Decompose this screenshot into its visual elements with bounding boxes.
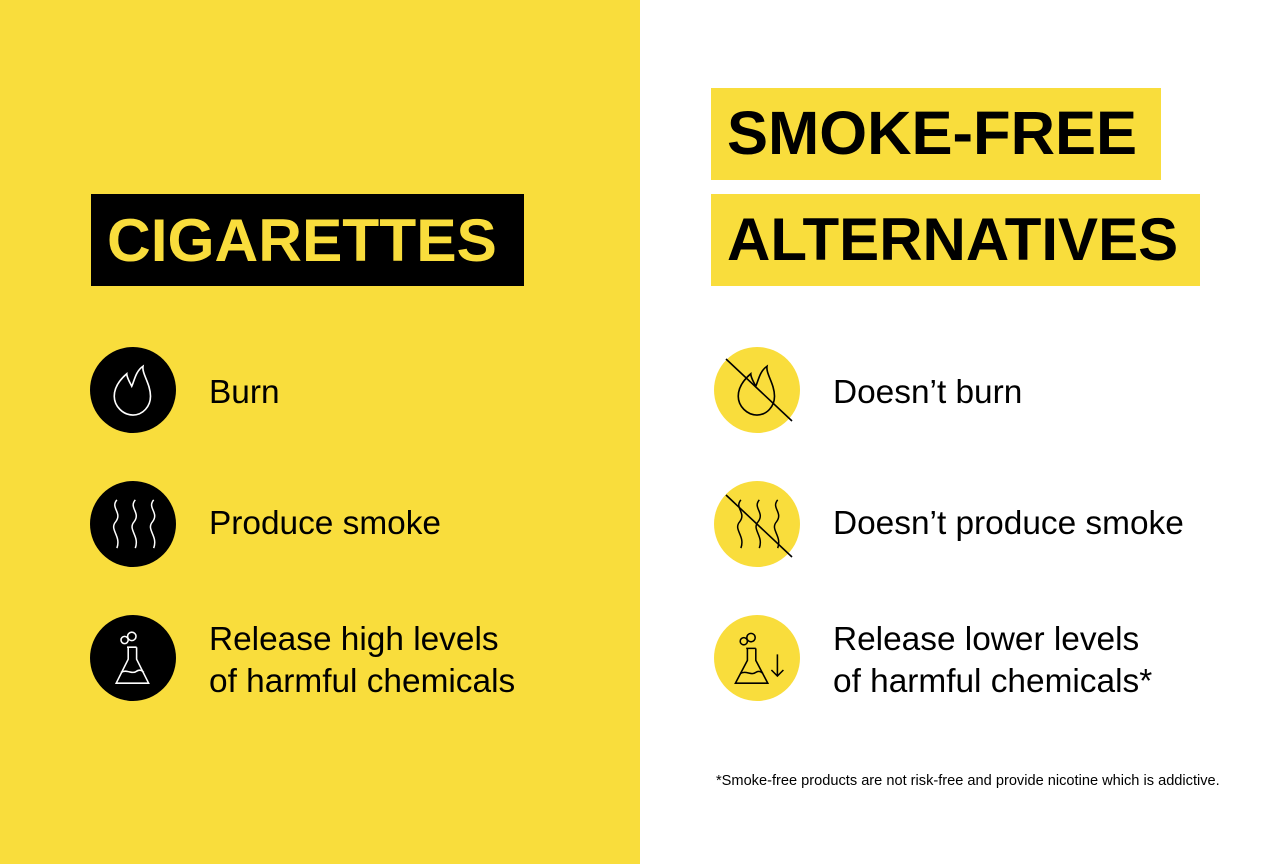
text: doesn't produce smoke: Doesn’t produce smoke: [833, 505, 1184, 542]
heading line 1: SMOKE-FREE: [727, 99, 1137, 168]
heading line 2: ALTERNATIVES: [727, 206, 1178, 273]
footnote: *Smoke-free products are not risk-free and provide nicotine which is addictive.: [716, 773, 1220, 789]
text: release lower levels: Release lower levels: [833, 621, 1139, 658]
icon: flask: [90, 615, 176, 701]
heading line 2: [711, 194, 1200, 286]
heading: cigarettes: CIGARETTES: [107, 206, 497, 274]
text: release high levels: [209, 621, 515, 700]
text: release high levels: Release high levels: [209, 621, 499, 658]
text: produce smoke: Produce smoke: [209, 505, 441, 542]
panel: smoke-free alternatives: [711, 88, 1220, 789]
text: release high levels: of harmful chemicals: [209, 663, 515, 700]
icon: no flame: [714, 347, 800, 433]
icon: flask with down arrow: [714, 615, 800, 701]
text: release lower levels: [833, 621, 1152, 700]
icon: no smoke: [714, 481, 800, 567]
panel: cigarettes: [0, 0, 640, 864]
heading line 1: [711, 88, 1161, 180]
icon: smoke: [90, 481, 176, 567]
text: doesn't burn: Doesn’t burn: [833, 374, 1022, 411]
heading: cigarettes: [91, 194, 524, 286]
icon: flame: [90, 347, 176, 433]
text: burn: Burn: [209, 374, 280, 411]
text: release lower levels: of harmful chemicals*: [833, 663, 1152, 700]
